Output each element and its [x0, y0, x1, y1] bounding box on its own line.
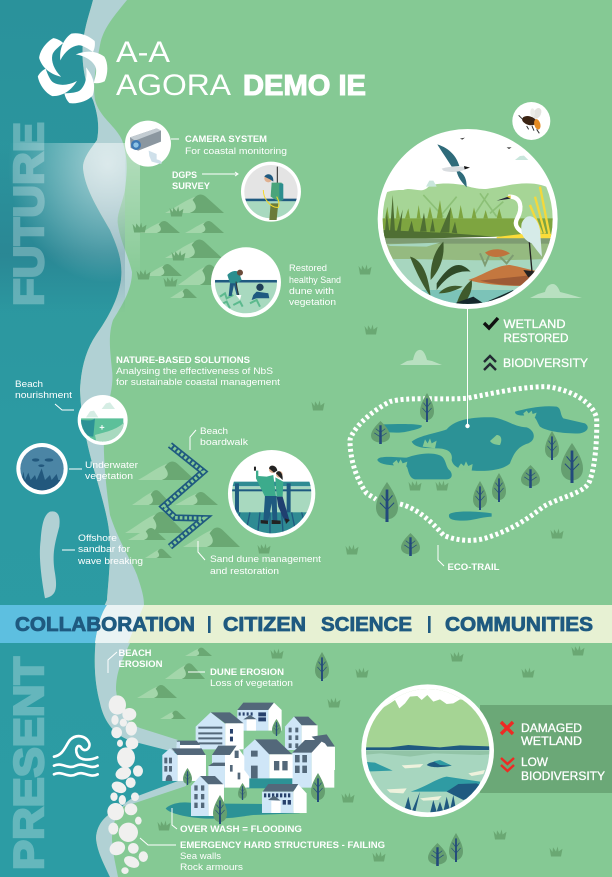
label: beach boardwalk: boardwalk [200, 436, 248, 447]
house: large striped [196, 712, 244, 749]
label: over wash [172, 808, 302, 834]
collaboration band: COLLABORATION [15, 614, 195, 636]
house: left [162, 741, 206, 781]
trees: wetland [371, 393, 583, 556]
label: restored dune: healthy Sand [289, 274, 341, 285]
status: wetland restored: RESTORED [504, 331, 569, 345]
label: offshore sandbar: wave breaking [77, 555, 143, 566]
collaboration band: CITIZEN [223, 614, 306, 636]
label: dune erosion: Loss of vegetation [210, 677, 293, 688]
label: camera system: For coastal monitoring [185, 145, 287, 156]
label: dgps survey: SURVEY [172, 180, 211, 191]
status: damaged wetland: DAMAGED [521, 721, 582, 735]
dunes: present [137, 648, 212, 719]
label: beach nourishment [15, 378, 74, 410]
boardwalk selfie circle [228, 450, 315, 537]
label: sand dune management: Sand dune management [210, 553, 321, 564]
label: sand dune management [198, 541, 321, 576]
camera circle [125, 121, 171, 167]
house: middle tall [208, 746, 249, 788]
dotted trail [350, 387, 597, 540]
ponds [377, 406, 588, 521]
label: dgps survey [172, 169, 238, 191]
label: sand dune management: and restoration [210, 565, 279, 576]
rock armour [107, 695, 148, 874]
label: underwater vegetation [69, 459, 138, 481]
label: beach nourishment: Beach [15, 378, 43, 389]
sea [0, 0, 186, 877]
wetland pointer line [465, 305, 470, 428]
status: wetland restored [484, 317, 569, 345]
label: nature-based solutions: Analysing the effectiveness of NbS [116, 365, 273, 376]
label: camera system: CAMERA SYSTEM [185, 133, 267, 144]
label: restored dune [289, 262, 341, 307]
collaboration band: COMMUNITIES [445, 614, 593, 636]
label: beach erosion: EROSION [118, 658, 163, 669]
flying bird [437, 144, 470, 187]
sand strip: upper coast [80, 0, 178, 753]
label: emergency hard structures [140, 838, 385, 872]
beach nourishment circle [78, 395, 128, 445]
label: dune erosion: DUNE EROSION [210, 666, 284, 677]
label: dune erosion [188, 666, 293, 688]
label: nature-based solutions: for sustainable coastal management [116, 376, 280, 387]
damaged wetland circle [361, 684, 497, 820]
status: low biodiversity: BIODIVERSITY [521, 769, 605, 783]
eco-trail wetland map [350, 387, 597, 540]
heading: PRESENT: PRESENT [5, 657, 52, 870]
status: damaged wetland [501, 721, 582, 748]
panel: damaged wetland status [480, 705, 612, 793]
label: offshore sandbar: Offshore [78, 532, 117, 543]
status: wetland restored: WETLAND [504, 317, 566, 331]
label: offshore sandbar [62, 532, 143, 566]
light glow over coast [0, 143, 140, 313]
trees in town [183, 719, 325, 824]
collaboration band [0, 605, 612, 643]
dgps survey circle [241, 162, 301, 225]
label: over wash: OVER WASH = FLOODING [180, 823, 302, 834]
title: A-A [116, 36, 170, 69]
wetland restored circle [377, 129, 560, 310]
grass tufts [133, 206, 585, 862]
status: low biodiversity: LOW [521, 755, 549, 769]
collaboration band: SCIENCE [321, 614, 412, 636]
label: dgps survey: DGPS [172, 169, 197, 180]
pond island and reeds [393, 411, 537, 471]
label: camera system [171, 133, 287, 156]
heading: FUTURE: FUTURE [5, 122, 52, 306]
label: emergency hard structures: Rock armours [180, 861, 243, 872]
logo pinwheel [33, 33, 112, 110]
label: emergency hard structures: EMERGENCY HARD STRUCTURES - FAILING [180, 839, 385, 850]
underwater vegetation circle [16, 443, 68, 494]
label: beach erosion [108, 647, 163, 673]
label: beach boardwalk [190, 425, 248, 450]
icon: wave [54, 736, 98, 776]
label: beach boardwalk: Beach [200, 425, 228, 436]
label: restored dune: dune with [289, 285, 334, 296]
status: damaged wetland: WETLAND [521, 734, 582, 748]
restored dune circle [211, 247, 281, 317]
beach boardwalk [163, 445, 204, 547]
label: underwater vegetation: Underwater [85, 459, 138, 470]
offshore sandbar [40, 511, 60, 598]
label: eco-trail [438, 545, 500, 572]
label: restored dune: Restored [289, 262, 327, 273]
house: right front [292, 734, 335, 788]
sand strip: lower coast [96, 778, 186, 877]
bee circle [512, 102, 550, 140]
label: emergency hard structures: Sea walls [180, 850, 221, 861]
house: top back [237, 703, 282, 731]
label: restored dune: vegetation [289, 296, 336, 307]
dunes: future [125, 194, 240, 558]
house: front left [191, 776, 224, 816]
title: AGORA [116, 69, 231, 102]
town and flood water [162, 703, 335, 819]
status: biodiversity up: BIODIVERSITY [503, 356, 588, 370]
label: offshore sandbar: sandbar for [78, 543, 130, 554]
label: underwater vegetation: vegetation [85, 470, 133, 481]
title: DEMO IE [243, 70, 366, 102]
icon: pale clouds [400, 284, 582, 365]
house: front right [262, 784, 307, 813]
flood water [166, 802, 300, 819]
label: beach erosion: BEACH [118, 647, 152, 658]
label: beach nourishment: nourishment [15, 389, 72, 400]
title [116, 36, 366, 102]
label: nature-based solutions [116, 354, 280, 387]
status: low biodiversity [501, 755, 605, 783]
label: eco-trail: ECO-TRAIL [448, 561, 500, 572]
label: nature-based solutions: NATURE-BASED SOLUTIONS [116, 354, 250, 365]
house: centre [243, 739, 293, 778]
house: right back [285, 717, 318, 750]
trees: present [315, 652, 463, 866]
